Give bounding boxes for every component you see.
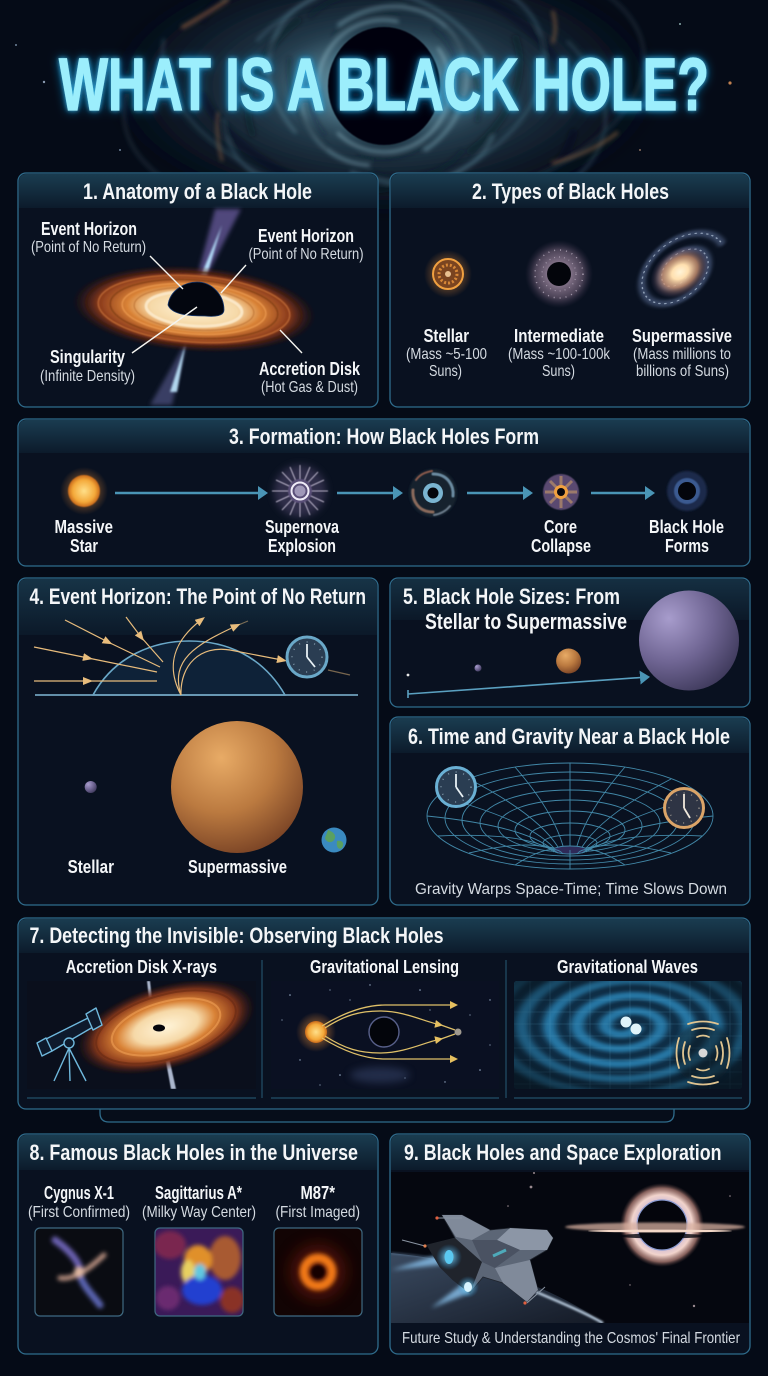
label: m87: (First Imaged) xyxy=(276,1204,360,1221)
sphere: stellar xyxy=(85,781,97,793)
heading 2: 2. Types of Black Holes xyxy=(472,179,669,204)
label: event horizon left: (Point of No Return) xyxy=(31,239,146,256)
arrow 1 xyxy=(115,492,266,494)
panel 4: event horizon xyxy=(18,578,378,905)
label: stellar: (Mass ~5-100 xyxy=(406,346,487,363)
spaceship xyxy=(402,1215,553,1305)
heading 8: 8. Famous Black Holes in the Universe xyxy=(30,1140,358,1165)
image: spaceship near black hole xyxy=(391,1172,749,1323)
arrow 2 xyxy=(337,492,401,494)
panel 1: anatomy xyxy=(18,173,378,407)
label: supermassive: billions of Suns) xyxy=(636,363,729,380)
icon: earth xyxy=(322,828,346,852)
caption 6: Gravity Warps Space-Time; Time Slows Down xyxy=(415,881,727,898)
hero background: swirling black hole xyxy=(15,0,732,255)
sphere: largest xyxy=(639,590,739,690)
arrow 4 xyxy=(591,492,653,494)
sphere: tiny xyxy=(407,674,409,676)
label: black hole forms: Black Hole xyxy=(649,517,724,537)
image: gravitational lensing xyxy=(281,984,491,1086)
scale arrow xyxy=(408,677,648,698)
panel 3: formation xyxy=(18,419,750,566)
label: supermassive: Supermassive xyxy=(632,326,732,346)
label: intermediate: (Mass ~100-100k xyxy=(508,346,611,363)
icon: supernova xyxy=(272,465,328,517)
planet horizon xyxy=(391,1253,603,1323)
label: supernova: Explosion xyxy=(268,536,336,556)
label: event horizon left: Event Horizon xyxy=(41,219,137,239)
label: event horizon right xyxy=(248,226,364,263)
illustration: accretion disk with jets xyxy=(69,209,319,405)
label: m87 xyxy=(276,1183,360,1221)
label: sagittarius: (Milky Way Center) xyxy=(142,1204,256,1221)
label: m87: M87* xyxy=(300,1183,335,1203)
icon: blue clock xyxy=(436,768,476,806)
label: cygnus: (First Confirmed) xyxy=(28,1204,130,1221)
label: singularity xyxy=(40,347,135,385)
heading 3: 3. Formation: How Black Holes Form xyxy=(229,424,539,449)
icon: core collapse xyxy=(543,474,579,510)
label: intermediate: Suns) xyxy=(542,363,575,380)
image: gravitational waves xyxy=(514,981,742,1089)
label: supermassive xyxy=(632,326,732,380)
sphere: medium xyxy=(556,648,581,674)
icon: clock xyxy=(287,637,327,677)
label: event horizon right: (Point of No Return) xyxy=(248,246,364,263)
icon: supermassive galaxy xyxy=(628,218,735,315)
label: accretion disk xyxy=(259,359,361,396)
label: event horizon left xyxy=(31,219,146,256)
panel 2: types xyxy=(390,173,750,407)
icon: black hole forms xyxy=(667,471,707,511)
image: m87* xyxy=(274,1228,362,1316)
label: massive star xyxy=(54,517,113,556)
engine thrust xyxy=(392,1254,440,1272)
label: stellar: Stellar xyxy=(68,857,114,877)
label: stellar: Suns) xyxy=(429,363,462,380)
label: intermediate xyxy=(508,326,611,380)
label: accretion disk: (Hot Gas & Dust) xyxy=(261,379,358,396)
label: supermassive: Supermassive xyxy=(188,857,287,877)
label: cygnus xyxy=(28,1183,130,1221)
label: core collapse: Core xyxy=(544,517,577,537)
label: core collapse: Collapse xyxy=(531,536,591,556)
sphere: small xyxy=(474,664,482,672)
label: massive star: Massive xyxy=(54,517,113,537)
heading 4: 4. Event Horizon: The Point of No Return xyxy=(30,584,366,609)
label: black hole forms: Forms xyxy=(665,536,709,556)
label: supernova: Supernova xyxy=(265,517,340,537)
panel 6: time and gravity xyxy=(390,717,750,905)
icon: orange clock xyxy=(664,788,704,828)
label: accretion disk: Accretion Disk xyxy=(259,359,361,379)
panel 5: sizes xyxy=(390,578,750,707)
label: stellar xyxy=(406,326,487,380)
diagram: warped space-time grid xyxy=(427,763,713,869)
heading 1: 1. Anatomy of a Black Hole xyxy=(83,179,312,204)
panel 8: famous black holes xyxy=(18,1134,378,1354)
gargantua black hole xyxy=(565,1183,745,1267)
label: massive star: Star xyxy=(70,536,98,556)
icon: swirling collapse xyxy=(409,469,457,517)
diagram: light paths at the horizon xyxy=(34,617,358,695)
label: singularity: Singularity xyxy=(50,347,125,367)
label: event horizon right: Event Horizon xyxy=(258,226,354,246)
panel 7: detecting xyxy=(18,918,768,1122)
label: sagittarius: Sagittarius A* xyxy=(155,1183,242,1203)
label: singularity: (Infinite Density) xyxy=(40,368,135,385)
heading 7: 7. Detecting the Invisible: Observing Black Holes xyxy=(30,923,444,948)
heading 5: 5. Black Hole Sizes: From xyxy=(403,584,620,609)
heading 5: Stellar to Supermassive xyxy=(425,609,627,634)
icon: massive star xyxy=(60,467,108,515)
subheading: waves: Gravitational Waves xyxy=(557,957,698,977)
tab under panel 7 xyxy=(100,1109,674,1122)
image: cygnus x-1 xyxy=(35,1228,123,1316)
arrow 3 xyxy=(467,492,531,494)
subheading: lensing: Gravitational Lensing xyxy=(310,957,459,977)
panel 9: space exploration xyxy=(390,1134,750,1354)
label: intermediate: Intermediate xyxy=(514,326,604,346)
subheading: x-rays: Accretion Disk X-rays xyxy=(66,957,217,977)
callout lines xyxy=(132,256,302,353)
image: accretion disk and telescope xyxy=(36,981,253,1089)
label: black hole forms xyxy=(649,517,724,556)
icon: stellar black hole xyxy=(424,250,472,298)
label: supermassive: (Mass millions to xyxy=(633,346,731,363)
label: stellar: Stellar xyxy=(424,326,469,346)
sphere: supermassive xyxy=(171,721,303,853)
icon: intermediate black hole xyxy=(525,240,593,308)
label: core collapse xyxy=(531,517,591,556)
label: cygnus: Cygnus X-1 xyxy=(44,1183,114,1203)
heading 5 xyxy=(403,584,627,634)
label: sagittarius xyxy=(142,1183,256,1221)
label: supernova xyxy=(265,517,340,556)
image: sagittarius a* xyxy=(154,1228,244,1316)
